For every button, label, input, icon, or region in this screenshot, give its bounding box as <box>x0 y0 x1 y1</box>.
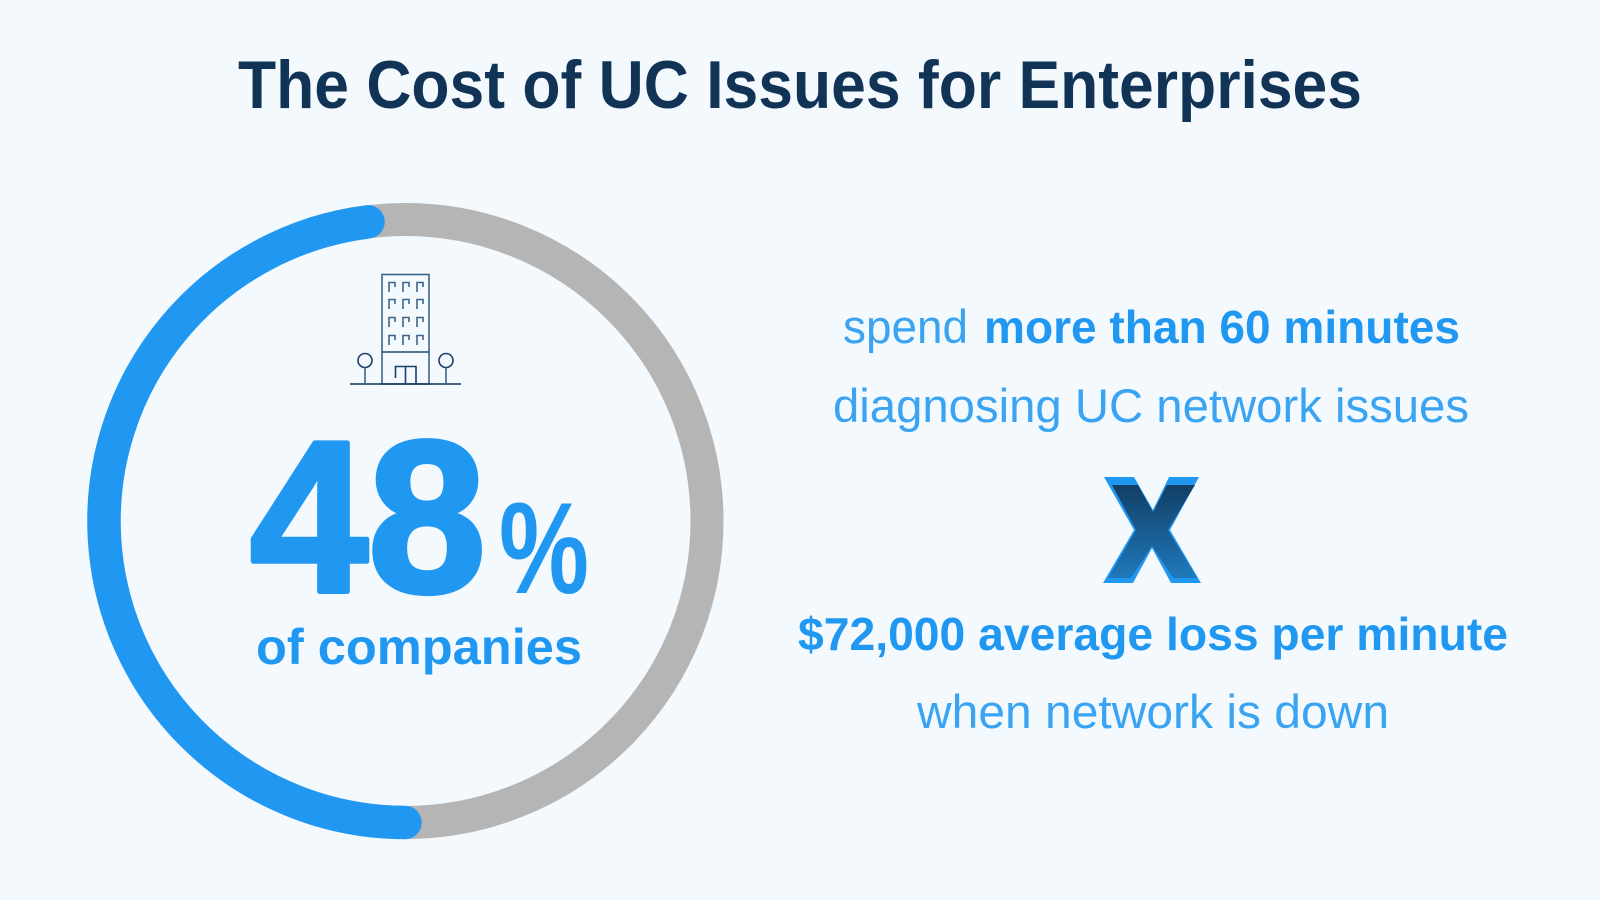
donut track <box>104 220 707 822</box>
text: spend more than 60 minutes: more than 60 minutes <box>984 301 1460 353</box>
donut chart: 48 percent <box>104 220 707 822</box>
text: spend more than 60 minutes: spend <box>843 300 968 353</box>
text: when network is down: when network is down <box>916 685 1389 738</box>
big number 48% <box>250 396 589 638</box>
text: diagnosing UC network issues: diagnosing UC network issues <box>833 379 1469 432</box>
digits 48: 48 <box>250 396 486 638</box>
title: The Cost of UC Issues for Enterprises <box>238 47 1362 123</box>
icon: office building <box>350 274 461 384</box>
X inner gradient face <box>1108 485 1197 578</box>
icon: multiplication X <box>1103 477 1201 583</box>
text: $72,000 average loss per minute: $72,000 average loss per minute <box>798 608 1508 660</box>
X outer bevel <box>1103 477 1201 583</box>
donut value arc <box>104 222 405 823</box>
percent sign: % <box>499 475 589 621</box>
label: of companies: of companies <box>256 619 582 675</box>
